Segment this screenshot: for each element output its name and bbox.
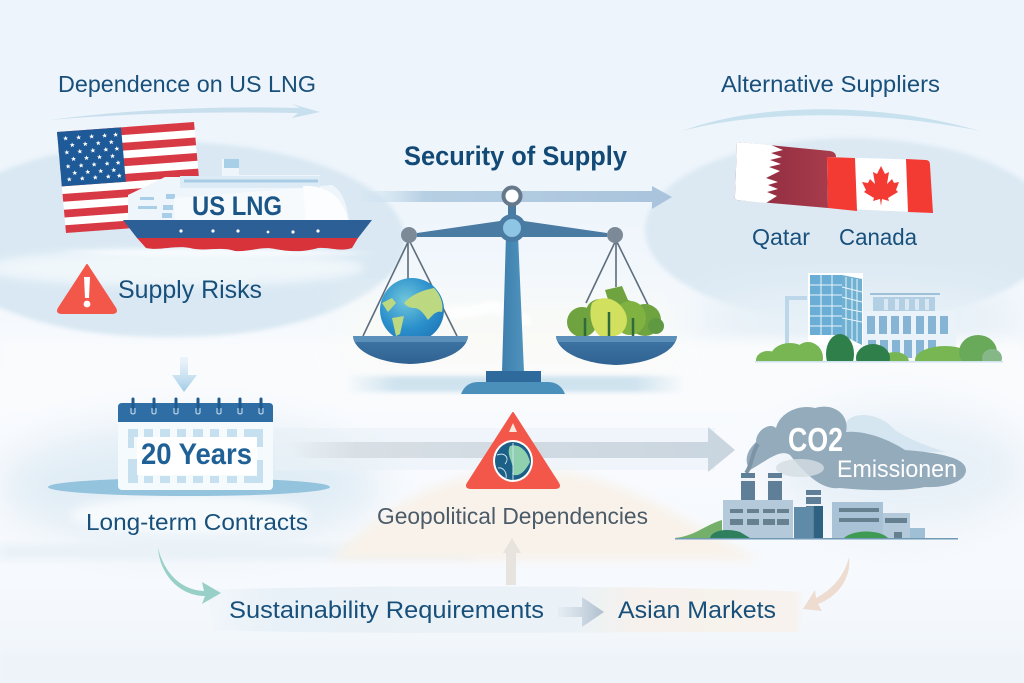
icon: 20 years calendar: 20 Years	[141, 438, 252, 471]
light cloud behind	[845, 415, 945, 452]
beam	[417, 221, 607, 237]
icon: LNG tanker ship: US LNG	[192, 191, 282, 221]
ground shadow	[345, 376, 685, 392]
panel: bottom strip	[205, 586, 805, 633]
label: Qatar: Qatar	[752, 224, 810, 250]
heading: Dependence on US LNG: Dependence on US LNG	[58, 71, 316, 97]
arrow: contracts to emissions	[275, 427, 735, 472]
arrow: up to geopolitical dependencies	[503, 538, 521, 585]
icon: Canada flag	[827, 157, 933, 213]
ground and shrubs	[675, 520, 722, 538]
label: Asian Markets: Asian Markets	[618, 597, 776, 624]
trees on right pan	[567, 286, 664, 337]
arrow: sustainability to Asian markets	[558, 597, 604, 627]
label: Long-term Contracts: Long-term Contracts	[86, 509, 308, 535]
globe on left pan	[380, 278, 444, 342]
icon: warning triangle	[58, 265, 116, 313]
icon: factory with CO2 cloud	[675, 407, 966, 540]
scale strings	[363, 240, 648, 336]
arrow: under left heading	[50, 104, 320, 120]
left pan	[353, 336, 468, 364]
grey cloud	[747, 407, 966, 490]
icon: 20 years calendar	[48, 399, 330, 496]
label: Geopolitical Dependencies: Geopolitical Dependencies	[377, 503, 648, 529]
knobs	[401, 227, 623, 243]
heading: Security of Supply: Security of Supply	[404, 141, 627, 171]
icon: office building with trees	[755, 273, 1003, 362]
base	[486, 371, 541, 382]
arrow: down to contracts	[172, 357, 197, 392]
icon: factory with CO2 cloud: Emissionen	[837, 456, 957, 483]
plant buildings	[723, 500, 793, 538]
arrow: beige curved	[803, 557, 849, 611]
icon: Qatar flag	[735, 142, 836, 208]
label: Supply Risks: Supply Risks	[118, 276, 262, 304]
pan rims	[353, 336, 677, 342]
icon: US flag	[57, 122, 203, 233]
icon: factory with CO2 cloud: CO2	[788, 421, 843, 458]
icon: LNG tanker ship	[60, 159, 375, 257]
post	[502, 235, 524, 372]
top ring	[508, 204, 516, 216]
right pan	[556, 336, 677, 365]
heading: Alternative Suppliers: Alternative Suppliers	[721, 71, 940, 97]
arrow: supply flow to alternative suppliers	[362, 186, 672, 209]
foot	[461, 382, 565, 394]
hub	[498, 214, 526, 242]
icon: geopolitical warning triangle	[467, 413, 559, 488]
balance scale	[345, 188, 685, 394]
arc under right heading	[682, 109, 980, 131]
label: Canada: Canada	[839, 224, 917, 250]
arrow: teal curved	[158, 548, 221, 604]
label: Sustainability Requirements: Sustainability Requirements	[229, 597, 544, 624]
chimneys	[741, 473, 821, 539]
